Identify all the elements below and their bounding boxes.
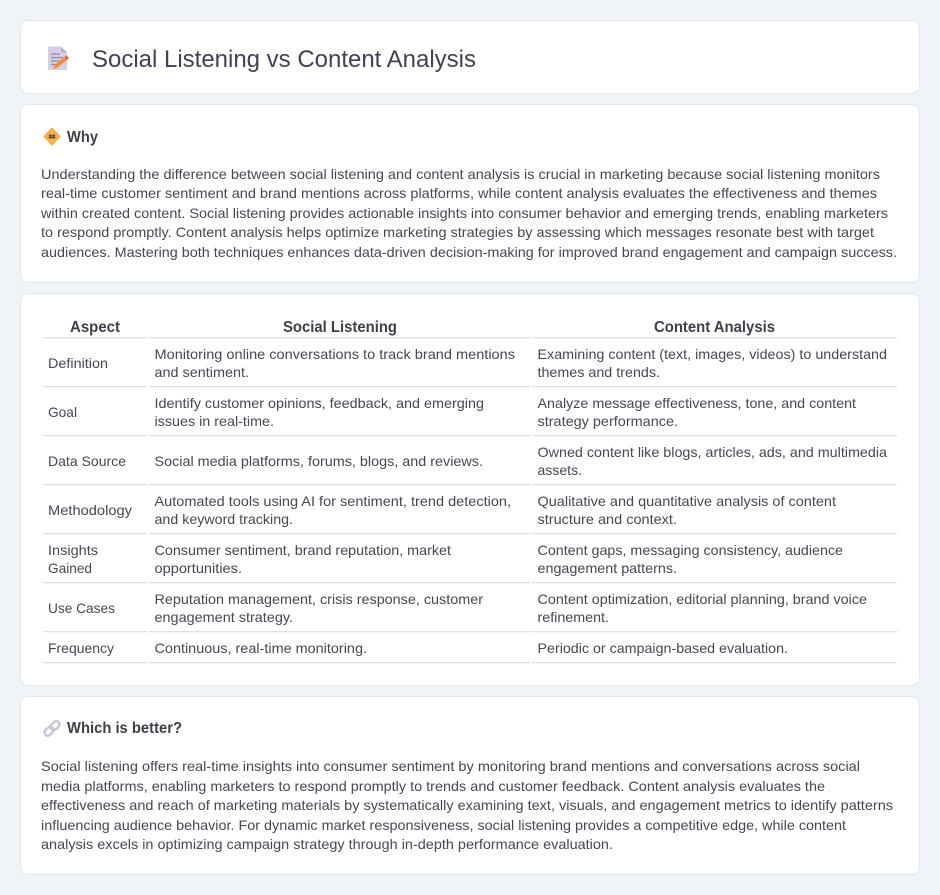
table row: goal: issues in real-time. (154, 413, 274, 429)
table row: goal: strategy performance. (538, 413, 678, 429)
table row: definition: Examining content (text, images, videos) to understand (538, 346, 887, 362)
text block: why paragraph: real-time customer sentiment and brand mentions across platforms, while content analysis evaluates the effectiveness and themes (41, 185, 877, 201)
table row: definition: themes and trends. (538, 364, 660, 380)
table row: data source (48, 444, 887, 478)
panel: title header (20, 20, 920, 94)
table row: goal (48, 395, 856, 429)
table row: methodology: structure and context. (538, 511, 677, 527)
text block: which is better paragraph: Social listening offers real-time insights into consumer sentiment by monitoring brand mentions and conversations across social (41, 758, 860, 774)
table row: frequency: Continuous, real-time monitoring. (154, 640, 367, 656)
table row: frequency (48, 640, 788, 656)
table row: insights gained: opportunities. (154, 560, 242, 576)
text block: why paragraph: to respond promptly. Content analysis helps optimize marketing strategies by assessing which messages resonate best with target (41, 224, 874, 240)
table row: definition: and sentiment. (154, 364, 249, 380)
table header row (70, 319, 775, 336)
panel: why (20, 104, 920, 282)
table row: methodology: Qualitative and quantitative analysis of content (538, 493, 836, 509)
table row: definition: Monitoring online conversations to track brand mentions (154, 346, 515, 362)
text block: why paragraph: within created content. Social listening provides actionable insights into consumer behavior and emerging trends, enabling marketers (40, 205, 888, 221)
table row: data source: Social media platforms, forums, blogs, and reviews. (154, 453, 483, 469)
table row: insights gained: Gained (48, 560, 92, 576)
text block: why paragraph: Understanding the difference between social listening and content analysis is crucial in marketing because social listening monitors (41, 166, 880, 182)
table row: insights gained: Consumer sentiment, brand reputation, market (154, 542, 451, 558)
table row: use cases (48, 591, 867, 625)
table row: methodology (48, 493, 836, 527)
heading: which is better: Which is better? (67, 720, 182, 737)
table row: frequency: Periodic or campaign-based evaluation. (538, 640, 788, 656)
table row: use cases: Content optimization, editorial planning, brand voice (538, 591, 867, 607)
text block: which is better paragraph: analysis excels in optimizing campaign strategy through in-depth performance evaluation. (41, 836, 613, 852)
heading: why: Why (67, 129, 98, 146)
table row: methodology: and keyword tracking. (154, 511, 293, 527)
table row: methodology: Automated tools using AI for sentiment, trend detection, (154, 493, 511, 509)
table row: data source: assets. (538, 462, 582, 478)
table row: definition (48, 346, 887, 380)
table row: use cases: Reputation management, crisis response, customer (154, 591, 483, 607)
table row: definition: Definition (48, 355, 108, 371)
table row: insights gained (48, 542, 843, 576)
text block: which is better paragraph: effectiveness and reach of marketing materials by systematically examining text, visuals, and engagement metrics to identify patterns (41, 797, 893, 813)
table header row: Content Analysis (654, 319, 775, 336)
table row: insights gained: engagement patterns. (538, 560, 677, 576)
table row: goal: Analyze message effectiveness, tone, and content (538, 395, 856, 411)
table row: goal: Goal (48, 404, 77, 420)
table row: use cases: Use Cases (48, 600, 115, 616)
text block: why paragraph: audiences. Mastering both techniques enhances data-driven decision-making for improved brand engagement and campaign success. (41, 244, 897, 260)
table row: frequency: Frequency (48, 640, 114, 656)
text block: which is better paragraph: media platforms, enabling marketers to respond promptly to trends and customer feedback. Content analysis evaluates the (41, 778, 825, 794)
table header row: Aspect (70, 319, 121, 336)
panel: which is better (20, 696, 920, 874)
icon: warning diamond (44, 128, 60, 145)
table row: methodology: Methodology (48, 502, 132, 518)
table row: data source: Data Source (48, 453, 126, 469)
text block: which is better paragraph (41, 758, 893, 852)
text block: why paragraph (40, 166, 897, 260)
table row: insights gained: Insights (48, 542, 98, 558)
table row: data source: Owned content like blogs, articles, ads, and multimedia (538, 444, 887, 460)
table row: goal: Identify customer opinions, feedback, and emerging (154, 395, 484, 411)
table header row: Social Listening (283, 319, 397, 336)
icon: chain link (43, 720, 61, 737)
table row: use cases: refinement. (538, 609, 609, 625)
icon: memo with pencil (48, 46, 69, 70)
title: Social Listening vs Content Analysis (92, 46, 476, 73)
text block: which is better paragraph: influencing audience behavior. For dynamic market responsiveness, social listening provides a competitive edge, while content (41, 817, 846, 833)
table row: insights gained: Content gaps, messaging consistency, audience (538, 542, 843, 558)
table row: use cases: engagement strategy. (154, 609, 293, 625)
panel: comparison table (20, 294, 920, 686)
